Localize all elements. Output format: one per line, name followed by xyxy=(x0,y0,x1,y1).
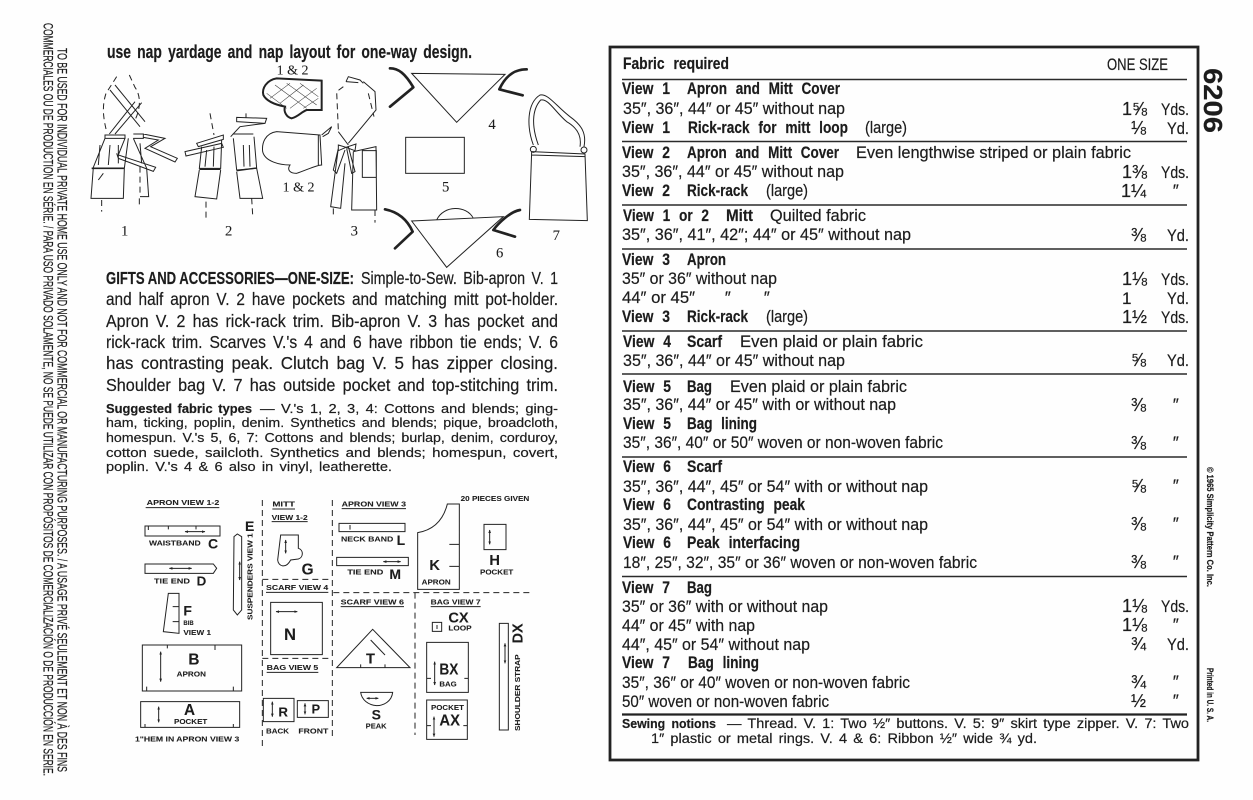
pattern pieces: bag view 5: FRONT xyxy=(298,726,329,735)
section: view 3: ″ xyxy=(724,288,731,307)
pattern pieces: scarf view 6 xyxy=(337,597,410,730)
section: view 4: ⅝ xyxy=(1131,350,1147,370)
section: view 7: 1⅛ xyxy=(1122,615,1148,635)
table header xyxy=(623,55,1168,74)
section: view 2: View 2 xyxy=(622,144,670,162)
pattern pieces: scarf view 6: S xyxy=(372,706,381,722)
illustration: plain mitt xyxy=(262,127,332,196)
section: view 7: ¾ xyxy=(1131,634,1147,654)
sewing notions note: 1″ plastic or metal rings. V. 4 & 6: Ribbon ½″ wide ¾ yd. xyxy=(651,731,1037,746)
section: view 6: ″ xyxy=(1172,552,1179,571)
section: view 3: Yds. xyxy=(1161,270,1189,289)
text block: suggested fabric types: — V.'s 1, 2, 3, 4: Cottons and blends; ging- xyxy=(260,401,558,416)
text block: description: Shoulder bag V. 7 has outside pocket and top-stitching trim. xyxy=(106,375,558,395)
pattern piece: scarf view 4: N xyxy=(284,625,296,644)
section: view 6: ″ xyxy=(1172,514,1179,533)
pattern pieces: apron view 3: 20 PIECES GIVEN xyxy=(461,494,529,503)
pattern pieces: scarf view 6: T xyxy=(366,651,375,667)
text block: description: Apron V. 2 has rick-rack trim. Bib-apron V. 3 has pocket and xyxy=(106,311,558,331)
section: view 2: Yds. xyxy=(1161,163,1189,182)
view numbers xyxy=(121,117,560,261)
pattern pieces: apron view 3: POCKET xyxy=(480,567,514,576)
section: view 4: View 4 xyxy=(623,333,672,351)
text block: suggested fabric types xyxy=(106,401,558,474)
pattern pieces: bag view 7: CX xyxy=(448,610,469,626)
section: view 5: ⅜ xyxy=(1131,395,1147,415)
text block: description: and half apron V. 2 have pockets and matching mitt pot-holder. xyxy=(106,289,558,309)
section: view 2: 1⅜ xyxy=(1122,162,1148,182)
pattern pieces: apron views 1-2: APRON VIEW 1-2 xyxy=(147,500,219,507)
pattern pieces: bag view 5: P xyxy=(312,702,321,716)
pattern piece: mitt: VIEW 1-2 xyxy=(272,513,308,522)
section: view 7: Bag xyxy=(687,579,712,597)
section: view 1: 1⅝ xyxy=(1122,99,1148,119)
pattern pieces: bag view 7: POCKET xyxy=(431,703,465,712)
pattern pieces: bag view 7: BX xyxy=(439,661,459,678)
panel: garment illustrations xyxy=(91,63,587,267)
section: view 3: View 3 xyxy=(622,251,670,269)
section: view 5: View 5 xyxy=(623,415,671,433)
panel: fabric required table xyxy=(610,47,1198,760)
section: view 1 or 2 mitt: View 1 or 2 xyxy=(623,207,709,225)
section: view 3: Yds. xyxy=(1161,308,1189,327)
section: view 7: Yds. xyxy=(1161,597,1189,616)
pattern pieces: apron views 1-2: B xyxy=(188,651,199,668)
section: view 2: 35″, 36″, 44″ or 45″ without nap xyxy=(622,162,844,181)
text block: description xyxy=(106,268,558,395)
table header: Fabric required xyxy=(623,55,729,73)
pattern piece: mitt: G xyxy=(302,561,314,578)
view numbers: 2 xyxy=(225,224,232,240)
section: view 4: 35″, 36″, 44″ or 45″ without nap xyxy=(623,351,845,370)
section: view 1: Yd. xyxy=(1167,119,1189,138)
pattern pieces: apron view 3: K xyxy=(429,558,440,574)
pattern pieces: apron views 1-2: SUSPENDERS VIEW 1 xyxy=(246,533,255,620)
section: view 3: View 3 xyxy=(622,308,670,326)
illustration: view 1 apron xyxy=(91,75,177,212)
section: view 6: ⅝ xyxy=(1131,476,1147,496)
section: view 1 xyxy=(622,80,1189,138)
section: view 1: View 1 xyxy=(622,119,670,137)
text block: suggested fabric types: ham, ticking, poplin, denim. Synthetics and blends; pique, broadcloth, xyxy=(106,415,558,430)
section: view 3: Yd. xyxy=(1167,289,1189,308)
pattern pieces: apron views 1-2: POCKET xyxy=(174,717,208,726)
section: view 3: Rick-rack xyxy=(687,308,749,326)
section: view 3: 1½ xyxy=(1122,307,1147,327)
section: view 1 or 2 mitt: Yd. xyxy=(1167,226,1189,245)
section: view 2: 1¼ xyxy=(1121,181,1147,201)
section: view 5 xyxy=(623,377,1179,453)
section: view 1: Yds. xyxy=(1161,100,1189,119)
section: view 1: ⅛ xyxy=(1131,118,1147,138)
section: view 7: ″ xyxy=(1172,672,1179,691)
view numbers: 3 xyxy=(351,224,358,240)
section: view 3: 1⅛ xyxy=(1122,269,1148,289)
text block: description: Simple-to-Sew. Bib-apron V. 1 xyxy=(361,268,558,288)
section: view 5: Bag xyxy=(687,378,712,396)
section: view 2: Even lengthwise striped or plain fabric xyxy=(856,143,1131,162)
section: view 3: (large) xyxy=(766,307,808,326)
pattern pieces: apron views 1-2: C xyxy=(208,535,218,551)
section: view 1 or 2 mitt: Mitt xyxy=(726,207,753,225)
pattern piece: mitt: MITT xyxy=(272,500,296,509)
pattern pieces: apron views 1-2: APRON xyxy=(177,670,206,679)
section: view 6: View 6 xyxy=(623,458,671,476)
section: view 7: 50″ woven or non-woven fabric xyxy=(622,692,829,711)
pattern pieces: bag view 7: DX xyxy=(511,623,527,643)
sewing notions note: — Thread. V. 1: Two ½″ buttons. V. 5: 9″ skirt type zipper. V. 7: Two xyxy=(727,716,1189,731)
pattern pieces: bag view 7: BAG VIEW 7 xyxy=(431,597,481,606)
pattern pieces: apron views 1-2: A xyxy=(184,702,195,719)
pattern pieces: apron views 1-2: D xyxy=(197,574,207,589)
pattern pieces: bag view 7: BAG xyxy=(439,680,457,689)
text block: description: rick-rack trim. Scarves V.'s 4 and 6 have ribbon tie ends; V. 6 xyxy=(106,332,558,352)
section: view 7: ″ xyxy=(1172,691,1179,710)
pattern pieces: bag view 5: BACK xyxy=(266,726,290,735)
pattern piece: scarf view 4 xyxy=(266,583,329,655)
section: view 1: View 1 xyxy=(622,80,670,98)
heading: nap layout note: use nap yardage and nap layout for one-way design. xyxy=(107,42,472,62)
section: view 2: Apron and Mitt Cover xyxy=(687,144,839,162)
section: view 2: ″ xyxy=(1172,181,1179,200)
section: view 7: ½ xyxy=(1131,691,1146,711)
pattern pieces: apron view 3: APRON xyxy=(422,577,451,586)
section: view 1: (large) xyxy=(865,118,907,137)
section: view 4: Yd. xyxy=(1167,351,1189,370)
table border xyxy=(610,47,1198,760)
section: view 6: 35″, 36″, 44″, 45″ or 54″ with or without nap xyxy=(623,477,928,496)
view numbers: 7 xyxy=(553,228,560,244)
section: view 7: ″ xyxy=(1172,615,1179,634)
pattern pieces: apron view 3: APRON VIEW 3 xyxy=(342,500,406,509)
pattern pieces: apron view 3: TIE END xyxy=(347,567,383,576)
section: view 3: 1 xyxy=(1122,289,1131,308)
section: view 4: Even plaid or plain fabric xyxy=(740,332,923,351)
text block: suggested fabric types: homespun. V.'s 5, 6, 7: Cottons and blends; burlap, denim, corduroy, xyxy=(106,430,558,445)
pattern section dividers xyxy=(262,500,530,748)
pattern pieces: apron views 1-2: TIE END xyxy=(154,576,190,585)
pattern pieces: apron views 1-2: VIEW 1 xyxy=(183,630,211,637)
pattern pieces: scarf view 6: SCARF VIEW 6 xyxy=(341,597,404,606)
illustration: view 2 half apron xyxy=(185,113,267,218)
section: view 3: ″ xyxy=(763,288,770,307)
pattern pieces: bag view 7: AX xyxy=(439,713,461,730)
section: view 1 or 2 mitt xyxy=(622,206,1189,245)
section: view 1 or 2 mitt: ⅜ xyxy=(1131,225,1147,245)
pattern pieces: apron view 3: H xyxy=(489,553,500,569)
section: view 6: View 6 xyxy=(623,496,671,514)
pattern pieces: apron view 3 xyxy=(337,494,529,589)
section: view 6: Peak interfacing xyxy=(687,534,800,552)
panel: pattern pieces diagram xyxy=(135,494,530,748)
section: view 1: Rick-rack for mitt loop xyxy=(688,119,848,137)
table header: ONE SIZE xyxy=(1107,55,1168,74)
section: view 7: View 7 xyxy=(622,579,670,597)
text block: suggested fabric types: cotton suede, sailcloth. Synthetics and blends; homespun, covert, xyxy=(106,445,558,460)
pattern piece: mitt xyxy=(272,500,314,578)
section: view 5: 35″, 36″, 44″ or 45″ with or without nap xyxy=(623,395,896,414)
section: view 7: View 7 xyxy=(622,654,670,672)
section: view 5: ⅜ xyxy=(1131,433,1147,453)
section: view 2 xyxy=(622,143,1189,201)
section: view 6: ⅜ xyxy=(1131,514,1147,534)
printed in USA line: Printed in U. S. A. xyxy=(1205,668,1215,722)
pattern pieces: scarf view 6: PEAK xyxy=(366,721,387,730)
text block: suggested fabric types: poplin. V.'s 4 & 6 also in vinyl, leatherette. xyxy=(106,459,392,474)
section: view 1 or 2 mitt: 35″, 36″, 41″, 42″; 44″ or 45″ without nap xyxy=(622,225,911,244)
section: view 3: 35″ or 36″ without nap xyxy=(622,269,777,288)
section: view 6: Scarf xyxy=(687,458,722,476)
section: view 1 or 2 mitt: Quilted fabric xyxy=(770,206,866,225)
copyright line: © 1965 Simplicity Pattern Co. Inc. xyxy=(1205,467,1215,587)
section: view 3: Apron xyxy=(687,251,726,269)
section: view 6: 35″, 36″, 44″, 45″ or 54″ with or without nap xyxy=(623,515,928,534)
pattern pieces: bag view 5 xyxy=(263,663,329,735)
section: view 7: 35″ or 36″ with or without nap xyxy=(622,597,828,616)
illustration: quilted mitt: 1 & 2 xyxy=(277,63,309,78)
sewing notions note xyxy=(622,716,1189,746)
section: view 6: ″ xyxy=(1172,476,1179,495)
section: view 7: ¾ xyxy=(1131,672,1147,692)
section: view 3 xyxy=(622,251,1189,327)
section: view 3: 44″ or 45″ xyxy=(622,288,695,307)
text block: suggested fabric types: Suggested fabric types xyxy=(106,401,252,416)
illustration: plain mitt: 1 & 2 xyxy=(283,181,315,196)
section: view 5: View 5 xyxy=(623,378,671,396)
illustration: view 5 clutch bag xyxy=(406,137,464,173)
view numbers: 4 xyxy=(488,117,496,133)
illustration: quilted mitt xyxy=(263,63,322,118)
section: view 5: ″ xyxy=(1172,395,1179,414)
illustration: view 3 bib apron xyxy=(331,77,377,223)
pattern piece: scarf view 4: SCARF VIEW 4 xyxy=(266,583,329,592)
pattern pieces: bag view 7: SHOULDER STRAP xyxy=(513,654,522,731)
pattern pieces: bag view 7: LOOP xyxy=(448,624,472,633)
section: view 5: Even plaid or plain fabric xyxy=(730,377,907,396)
section: view 7 xyxy=(622,579,1189,711)
section: view 5: Bag lining xyxy=(687,415,757,433)
text block: description: has contrasting peak. Clutch bag V. 5 has zipper closing. xyxy=(106,353,558,373)
section: view 1: Apron and Mitt Cover xyxy=(687,80,840,98)
side legal notice xyxy=(40,23,70,776)
pattern pieces: apron views 1-2: WAISTBAND xyxy=(149,539,201,548)
section: view 2: (large) xyxy=(766,181,808,200)
pattern pieces: apron view 3: NECK BAND xyxy=(341,535,393,544)
pattern pieces: apron views 1-2: 1"HEM IN APRON VIEW 3 xyxy=(135,735,239,744)
section: view 2: View 2 xyxy=(622,182,670,200)
pattern pieces: apron view 3: M xyxy=(389,566,401,582)
illustration: view 7 shoulder bag xyxy=(529,95,587,221)
pattern pieces: apron views 1-2: E xyxy=(245,518,254,534)
pattern pieces: apron views 1-2: BIB xyxy=(183,621,194,627)
section: view 7: 44″ or 45″ with nap xyxy=(622,616,755,635)
section: view 2: Rick-rack xyxy=(687,182,749,200)
pattern number 6206: 6206 xyxy=(1198,68,1228,133)
pattern pieces: apron views 1-2 xyxy=(135,500,255,744)
section: view 4 xyxy=(623,332,1189,370)
sewing notions note: Sewing notions xyxy=(622,716,716,731)
section: view 1: 35″, 36″, 44″ or 45″ without nap xyxy=(623,99,845,118)
section: view 6 xyxy=(623,458,1179,572)
section: view 7: 1⅛ xyxy=(1122,596,1148,616)
view numbers: 1 xyxy=(121,224,128,240)
illustration: view 4 scarf xyxy=(390,68,527,122)
section: view 7: 44″, 45″ or 54″ without nap xyxy=(622,635,810,654)
section: view 7: Yd. xyxy=(1167,635,1189,654)
section dividers xyxy=(622,80,1187,714)
section: view 5: ″ xyxy=(1172,433,1179,452)
section: view 6: Contrasting peak xyxy=(687,496,806,514)
pattern pieces: apron view 3: L xyxy=(397,532,406,548)
section: view 6: View 6 xyxy=(623,534,671,552)
text block: description: GIFTS AND ACCESSORIES—ONE-SIZE: xyxy=(106,268,354,288)
section: view 6: ⅜ xyxy=(1131,552,1147,572)
section: view 7: 35″, 36″ or 40″ woven or non-woven fabric xyxy=(622,673,910,692)
illustration: view 6 scarf xyxy=(385,209,520,267)
section: view 6: 18″, 25″, 32″, 35″ or 36″ woven or non-woven fabric xyxy=(623,553,977,572)
pattern pieces: apron views 1-2: F xyxy=(183,603,192,619)
pattern pieces: bag view 5: R xyxy=(278,705,288,720)
pattern pieces: bag view 5: BAG VIEW 5 xyxy=(267,663,318,672)
view numbers: 5 xyxy=(442,180,449,196)
section: view 4: Scarf xyxy=(687,333,722,351)
view numbers: 6 xyxy=(496,245,503,261)
section: view 5: 35″, 36″, 40″ or 50″ woven or non-woven fabric xyxy=(623,433,943,452)
pattern pieces: bag view 7 xyxy=(427,597,527,739)
section: view 7: Bag lining xyxy=(688,654,759,672)
